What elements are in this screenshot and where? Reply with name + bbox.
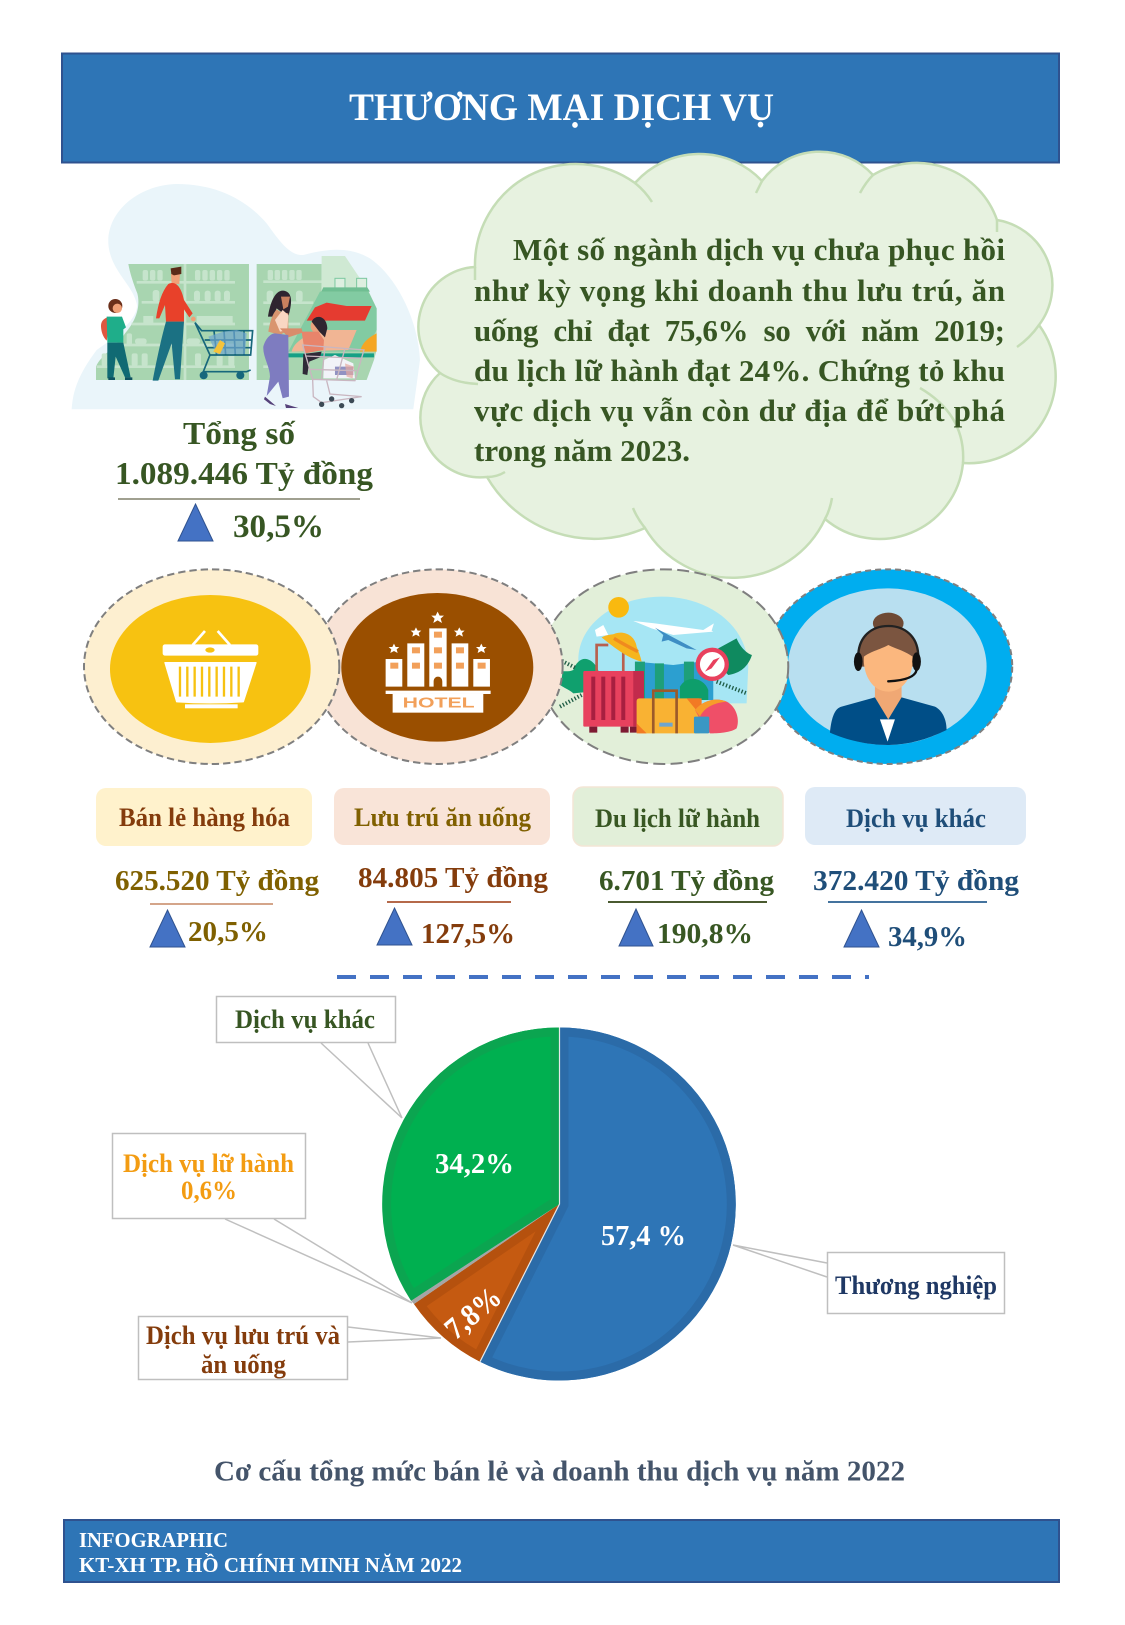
sector: other services: 372.420 Tỷ đồng: [813, 865, 1020, 897]
callout: commerce: [733, 1245, 1004, 1314]
total figures: 30,5%: [233, 509, 324, 545]
sector: retail: Bán lẻ hàng hóa: [119, 803, 290, 832]
title banner: [62, 54, 1059, 162]
produce display: [288, 256, 377, 380]
sector: accommodation: Lưu trú ăn uống: [354, 803, 531, 832]
icon: hotel: HOTEL: [403, 696, 475, 712]
sector: accommodation: 127,5%: [421, 918, 515, 950]
sector: retail: 20,5%: [188, 916, 268, 948]
callout: travel: [112, 1134, 412, 1303]
red suitcase: [597, 645, 623, 672]
commentary text: Một số ngành dịch vụ chưa phục hồi: [513, 232, 1005, 267]
sector: travel: 190,8%: [657, 918, 753, 950]
commentary text: [474, 232, 1006, 468]
commentary text: trong năm 2023.: [474, 433, 690, 468]
pie chart: 7,8%: [437, 1279, 508, 1346]
footer banner: INFOGRAPHIC: [79, 1528, 228, 1552]
footer banner: KT-XH TP. HỒ CHÍNH MINH NĂM 2022: [79, 1553, 462, 1577]
boy: [101, 299, 132, 380]
commentary text: uống chỉ đạt 75,6% so với năm 2019;: [474, 313, 1005, 348]
commentary text: du lịch lữ hành đạt 24%. Chứng tỏ khu: [474, 353, 1005, 388]
panel: cloud commentary: [418, 152, 1056, 578]
callout: accommodation: [138, 1316, 441, 1380]
sector: accommodation: [334, 788, 550, 950]
sector: travel: [573, 787, 783, 950]
hat: [602, 633, 642, 662]
woman and child with cart: [263, 291, 364, 408]
man with cart: [153, 267, 253, 381]
total figures: Tổng số: [183, 415, 296, 451]
sector: travel: Du lịch lữ hành: [595, 804, 761, 833]
plane: [633, 621, 714, 635]
callout: travel: Dịch vụ lữ hành: [123, 1149, 295, 1178]
buildings: [635, 660, 713, 700]
total figures: 1.089.446 Tỷ đồng: [115, 455, 373, 491]
commentary text: vực dịch vụ vẫn còn dư địa để bứt phá: [474, 393, 1006, 428]
sector: other services: 34,9%: [888, 921, 967, 953]
beach ball: [695, 700, 738, 733]
callout: other services: [216, 996, 402, 1118]
callout: travel: 0,6%: [181, 1176, 237, 1205]
commentary text: như kỳ vọng khi doanh thu lưu trú, ăn: [474, 273, 1005, 308]
sector: other services: [805, 787, 1026, 953]
icon: customer service agent: [764, 569, 1012, 764]
icon: shopping basket: [84, 569, 339, 764]
pie chart: [382, 1027, 736, 1381]
callout: accommodation: Dịch vụ lưu trú và: [146, 1321, 340, 1350]
title banner: THƯƠNG MẠI DỊCH VỤ: [349, 86, 774, 129]
sector: accommodation: 84.805 Tỷ đồng: [358, 862, 549, 894]
icon: up triangle: [178, 504, 213, 541]
icon: travel: [540, 569, 788, 764]
sector: retail: [96, 788, 319, 948]
pie chart: 57,4 %: [601, 1220, 686, 1252]
callout: commerce: Thương nghiệp: [835, 1271, 997, 1300]
total figures: [115, 415, 373, 545]
sector: other services: Dịch vụ khác: [846, 804, 986, 833]
footer banner: [64, 1520, 1059, 1582]
compass sign: [696, 648, 729, 681]
sector: travel: 6.701 Tỷ đồng: [599, 865, 774, 897]
illustration: supermarket shoppers: [72, 184, 420, 409]
callout: accommodation: ăn uống: [201, 1350, 286, 1379]
chart caption: Cơ cấu tổng mức bán lẻ và doanh thu dịch vụ năm 2022: [214, 1456, 905, 1488]
yellow suitcase: [637, 698, 702, 733]
pie chart: 34,2%: [435, 1148, 514, 1180]
leaves: [550, 659, 607, 693]
callout: other services: Dịch vụ khác: [235, 1005, 375, 1034]
sector icon row: [84, 569, 1012, 764]
sector: retail: 625.520 Tỷ đồng: [115, 865, 319, 897]
icon: hotel: [314, 569, 563, 764]
